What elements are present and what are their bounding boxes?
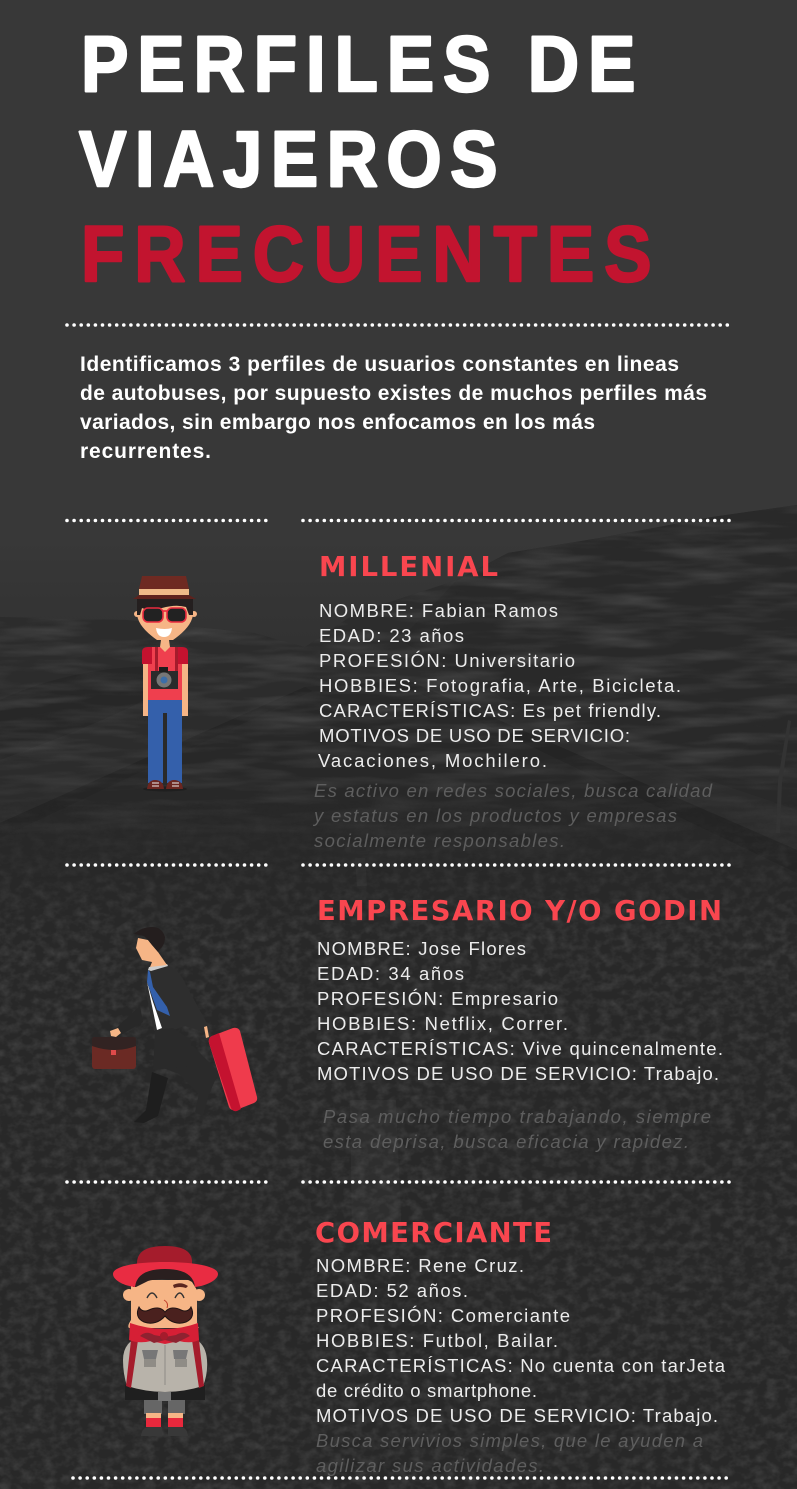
profile details: EDAD: 34 años	[317, 963, 464, 984]
heading: COMERCIANTE	[315, 1217, 552, 1249]
profile details: HOBBIES: Futbol, Bailar.	[316, 1330, 558, 1351]
description: socialmente responsables.	[314, 830, 565, 851]
panel: comerciante	[113, 1217, 726, 1476]
profile details: EDAD: 52 años.	[316, 1280, 468, 1301]
profile details	[317, 938, 723, 1084]
profile details: MOTIVOS DE USO DE SERVICIO: Trabajo.	[317, 1063, 719, 1084]
description: esta deprisa, busca eficacia y rapidez.	[323, 1131, 689, 1152]
description: Busca servivios simples, que le ayuden a	[316, 1430, 703, 1451]
profile details: PROFESIÓN: Universitario	[319, 650, 575, 671]
profile details: NOMBRE: Jose Flores	[317, 938, 526, 959]
profile details: EDAD: 23 años	[319, 625, 464, 646]
icon: businessman character	[92, 927, 257, 1123]
description: agilizar sus actividades.	[316, 1455, 544, 1476]
profile details: MOTIVOS DE USO DE SERVICIO:	[319, 725, 630, 746]
panel: empresario	[92, 895, 723, 1152]
profile details	[316, 1255, 726, 1426]
intro text: variados, sin embargo nos enfocamos en los más	[80, 411, 595, 434]
profile details: CARACTERÍSTICAS: Es pet friendly.	[319, 700, 661, 721]
intro text: recurrentes.	[80, 440, 211, 463]
profile details: CARACTERÍSTICAS: Vive quincenalmente.	[317, 1038, 723, 1059]
profile details	[318, 600, 681, 771]
heading: MILLENIAL	[319, 551, 498, 583]
intro text	[80, 353, 707, 463]
description	[323, 1106, 711, 1152]
description: Es activo en redes sociales, busca calidad	[314, 780, 713, 801]
profile details: MOTIVOS DE USO DE SERVICIO: Trabajo.	[316, 1405, 718, 1426]
intro text: de autobuses, por supuesto existes de muchos perfiles más	[80, 382, 707, 405]
description	[316, 1430, 703, 1476]
icon: merchant character	[113, 1246, 218, 1436]
profile details: Vacaciones, Mochilero.	[318, 750, 547, 771]
title: PERFILES DE	[81, 20, 635, 108]
description	[312, 780, 713, 851]
profile details: de crédito o smartphone.	[316, 1380, 537, 1401]
profile details: HOBBIES: Netflix, Correr.	[317, 1013, 568, 1034]
profile details: PROFESIÓN: Empresario	[317, 988, 558, 1009]
description: Pasa mucho tiempo trabajando, siempre	[323, 1106, 711, 1127]
description: y estatus en los productos y empresas	[312, 805, 677, 826]
title	[79, 20, 652, 298]
heading: EMPRESARIO Y/O GODIN	[317, 895, 722, 927]
profile details: PROFESIÓN: Comerciante	[316, 1305, 570, 1326]
profile details: CARACTERÍSTICAS: No cuenta con tarJeta	[316, 1355, 726, 1376]
profile details: NOMBRE: Rene Cruz.	[316, 1255, 524, 1276]
panel: millenial	[133, 551, 713, 851]
title: FRECUENTES	[81, 210, 652, 298]
profile details: HOBBIES: Fotografia, Arte, Bicicleta.	[319, 675, 681, 696]
title: VIAJEROS	[79, 115, 498, 203]
intro text: Identificamos 3 perfiles de usuarios constantes en lineas	[80, 353, 679, 376]
icon: millennial character	[133, 576, 197, 792]
profile details: NOMBRE: Fabian Ramos	[319, 600, 558, 621]
